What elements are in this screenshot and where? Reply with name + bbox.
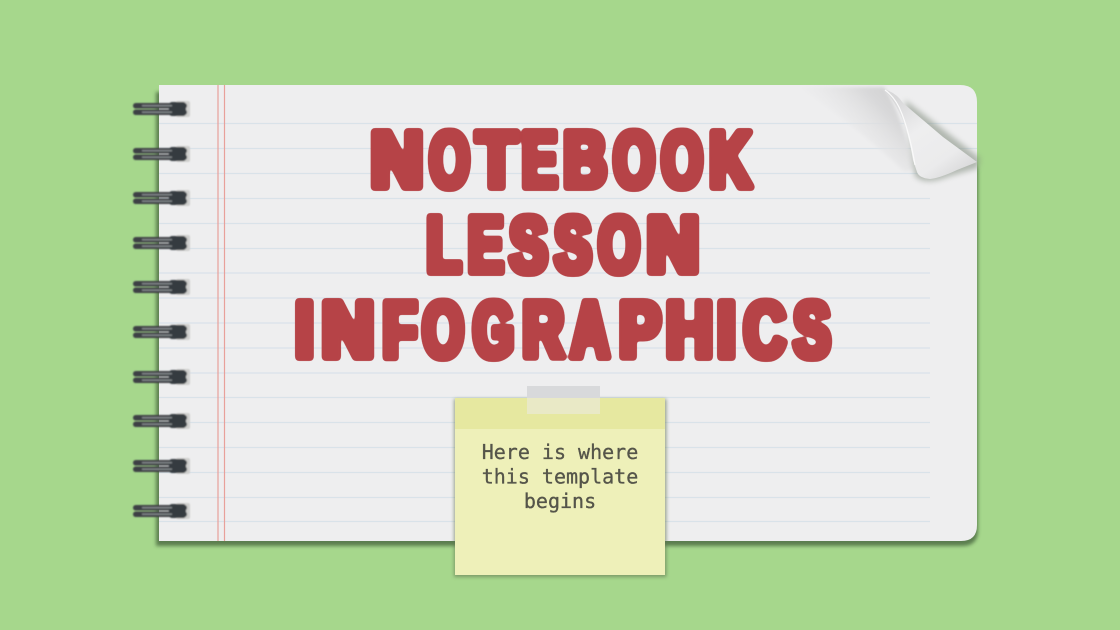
title line 1: K [710, 115, 751, 204]
note text: Here is where [482, 440, 638, 464]
title line 3: F [383, 285, 417, 374]
title line 3: A [571, 285, 609, 374]
notebook page [156, 85, 978, 546]
title line 2: N [647, 200, 699, 289]
title line 1: O [614, 115, 654, 204]
title line 3: P [620, 285, 660, 374]
note top band [455, 398, 665, 429]
title line 3: G [473, 285, 514, 374]
page shadow [156, 92, 978, 546]
title line 1: N [371, 115, 423, 204]
margin lines [218, 85, 224, 541]
title line 2: L [427, 200, 461, 289]
curl shading on page [800, 87, 914, 172]
title line 1: O [430, 115, 469, 204]
title line 3: N [322, 285, 374, 374]
title line 3: S [794, 285, 830, 374]
title line 2: O [599, 200, 639, 289]
note text: this template [482, 464, 638, 488]
title line 2: S [555, 200, 591, 289]
title line 1: E [522, 115, 557, 204]
sticky note [454, 386, 666, 577]
ruled lines [159, 124, 977, 522]
title line 3: R [523, 285, 564, 374]
title line 1: O [662, 115, 702, 204]
title line 3: O [423, 285, 463, 374]
note body [455, 398, 665, 575]
curl drop shadow [905, 100, 980, 181]
title line 1: T [477, 115, 516, 204]
title line 3: I [717, 285, 736, 374]
page curl [800, 87, 980, 181]
note text: begins [524, 489, 596, 513]
title [295, 115, 830, 374]
title line 3: H [666, 285, 713, 374]
spiral binding [133, 101, 190, 519]
tape [527, 386, 600, 414]
page sheet [159, 85, 977, 541]
title line 1: B [564, 115, 606, 204]
note shadow [454, 399, 666, 577]
title line 2: E [468, 200, 503, 289]
curl highlight [885, 90, 915, 165]
title line 2: S [510, 200, 547, 289]
title line 3: I [295, 285, 314, 374]
note text [482, 440, 638, 513]
title line 3: C [744, 285, 785, 374]
curled flap [883, 89, 977, 179]
